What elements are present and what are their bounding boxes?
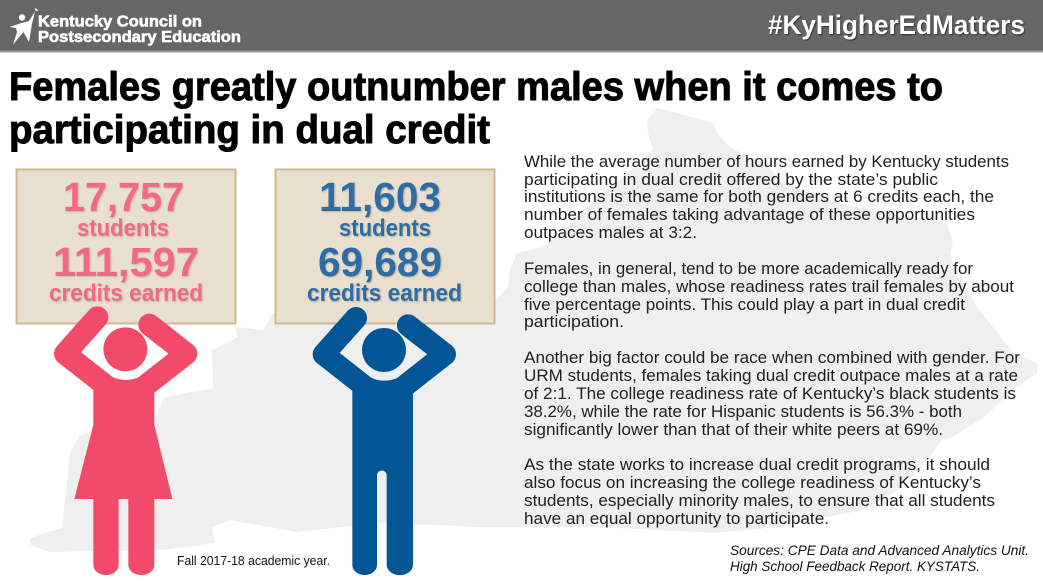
male credits count: 69,689 bbox=[318, 239, 442, 285]
text block: paragraph 4: As the state works to increase dual credit programs, it should bbox=[524, 456, 990, 474]
male credits label: credits earned bbox=[307, 280, 462, 307]
title bbox=[9, 65, 943, 152]
text block: paragraph 2 bbox=[524, 260, 1014, 331]
header bar bbox=[0, 0, 1043, 52]
male arm over panel bbox=[342, 318, 422, 336]
text block: paragraph 4 bbox=[524, 456, 995, 528]
logo text bbox=[38, 14, 241, 46]
female credits count: 111,597 bbox=[53, 239, 199, 285]
text block: paragraph 2: participation. bbox=[524, 313, 624, 331]
female students label: students bbox=[77, 215, 169, 242]
text block: paragraph 1 bbox=[524, 153, 1009, 242]
text block: paragraph 3 bbox=[524, 349, 1021, 439]
text block: paragraph 3: of 2:1. The college readiness rate of Kentucky’s black students is bbox=[524, 385, 1016, 403]
text block: paragraph 1: participating in dual credit offered by the state’s public bbox=[524, 171, 938, 189]
background map: Kentucky silhouette bbox=[30, 108, 1037, 552]
icon: male figure bbox=[324, 318, 445, 575]
male students label: students bbox=[339, 215, 431, 242]
text block: paragraph 1: While the average number of hours earned by Kentucky students bbox=[524, 153, 1009, 171]
title: Females greatly outnumber males when it comes to bbox=[9, 65, 943, 109]
title: participating in dual credit bbox=[9, 108, 490, 152]
text block: paragraph 4: students, especially minority males, to ensure that all students bbox=[524, 492, 995, 510]
female students count: 17,757 bbox=[63, 174, 184, 220]
male students count: 11,603 bbox=[319, 174, 441, 220]
logo: Kentucky Council on Postsecondary Education bbox=[10, 8, 241, 46]
text block: paragraph 3: significantly lower than that of their white peers at 69%. bbox=[524, 421, 943, 439]
text block: paragraph 1: number of females taking advantage of these opportunities bbox=[524, 206, 975, 224]
text block: paragraph 1: institutions is the same for both genders at 6 credits each, the bbox=[524, 188, 994, 206]
text block: paragraph 2: college than males, whose readiness rates trail females by about bbox=[524, 278, 1014, 296]
text block: paragraph 1: outpaces males at 3:2. bbox=[524, 224, 697, 242]
logo text: Kentucky Council on bbox=[38, 14, 202, 30]
panel: female stats bbox=[16, 170, 236, 336]
text block: paragraph 4: have an equal opportunity to participate. bbox=[524, 510, 829, 528]
panel: male stats bbox=[276, 170, 494, 336]
text block: paragraph 3: 38.2%, while the rate for Hispanic students is 56.3% - both bbox=[524, 403, 962, 421]
text block: paragraph 3: URM students, females taking dual credit outpace males at a rate bbox=[524, 367, 1018, 385]
text block: paragraph 4: also focus on increasing the college readiness of Kentucky’s bbox=[524, 474, 981, 492]
sources bbox=[730, 543, 1029, 574]
logo text: Postsecondary Education bbox=[38, 29, 241, 46]
female arm over panel bbox=[83, 317, 163, 336]
sources: High School Feedback Report. KYSTATS. bbox=[730, 559, 980, 574]
text block: paragraph 3: Another big factor could be race when combined with gender. For bbox=[524, 349, 1021, 367]
text block: paragraph 2: five percentage points. This could play a part in dual credit bbox=[524, 296, 965, 314]
sources: Sources: CPE Data and Advanced Analytics Unit. bbox=[730, 543, 1029, 558]
footnote: academic year: Fall 2017-18 academic year. bbox=[177, 554, 330, 568]
hashtag: #KyHigherEdMatters bbox=[768, 10, 1025, 40]
female credits label: credits earned bbox=[49, 280, 203, 307]
text block: paragraph 2: Females, in general, tend to be more academically ready for bbox=[524, 260, 974, 278]
icon: star figure bbox=[10, 8, 38, 44]
icon: female figure bbox=[65, 317, 186, 575]
